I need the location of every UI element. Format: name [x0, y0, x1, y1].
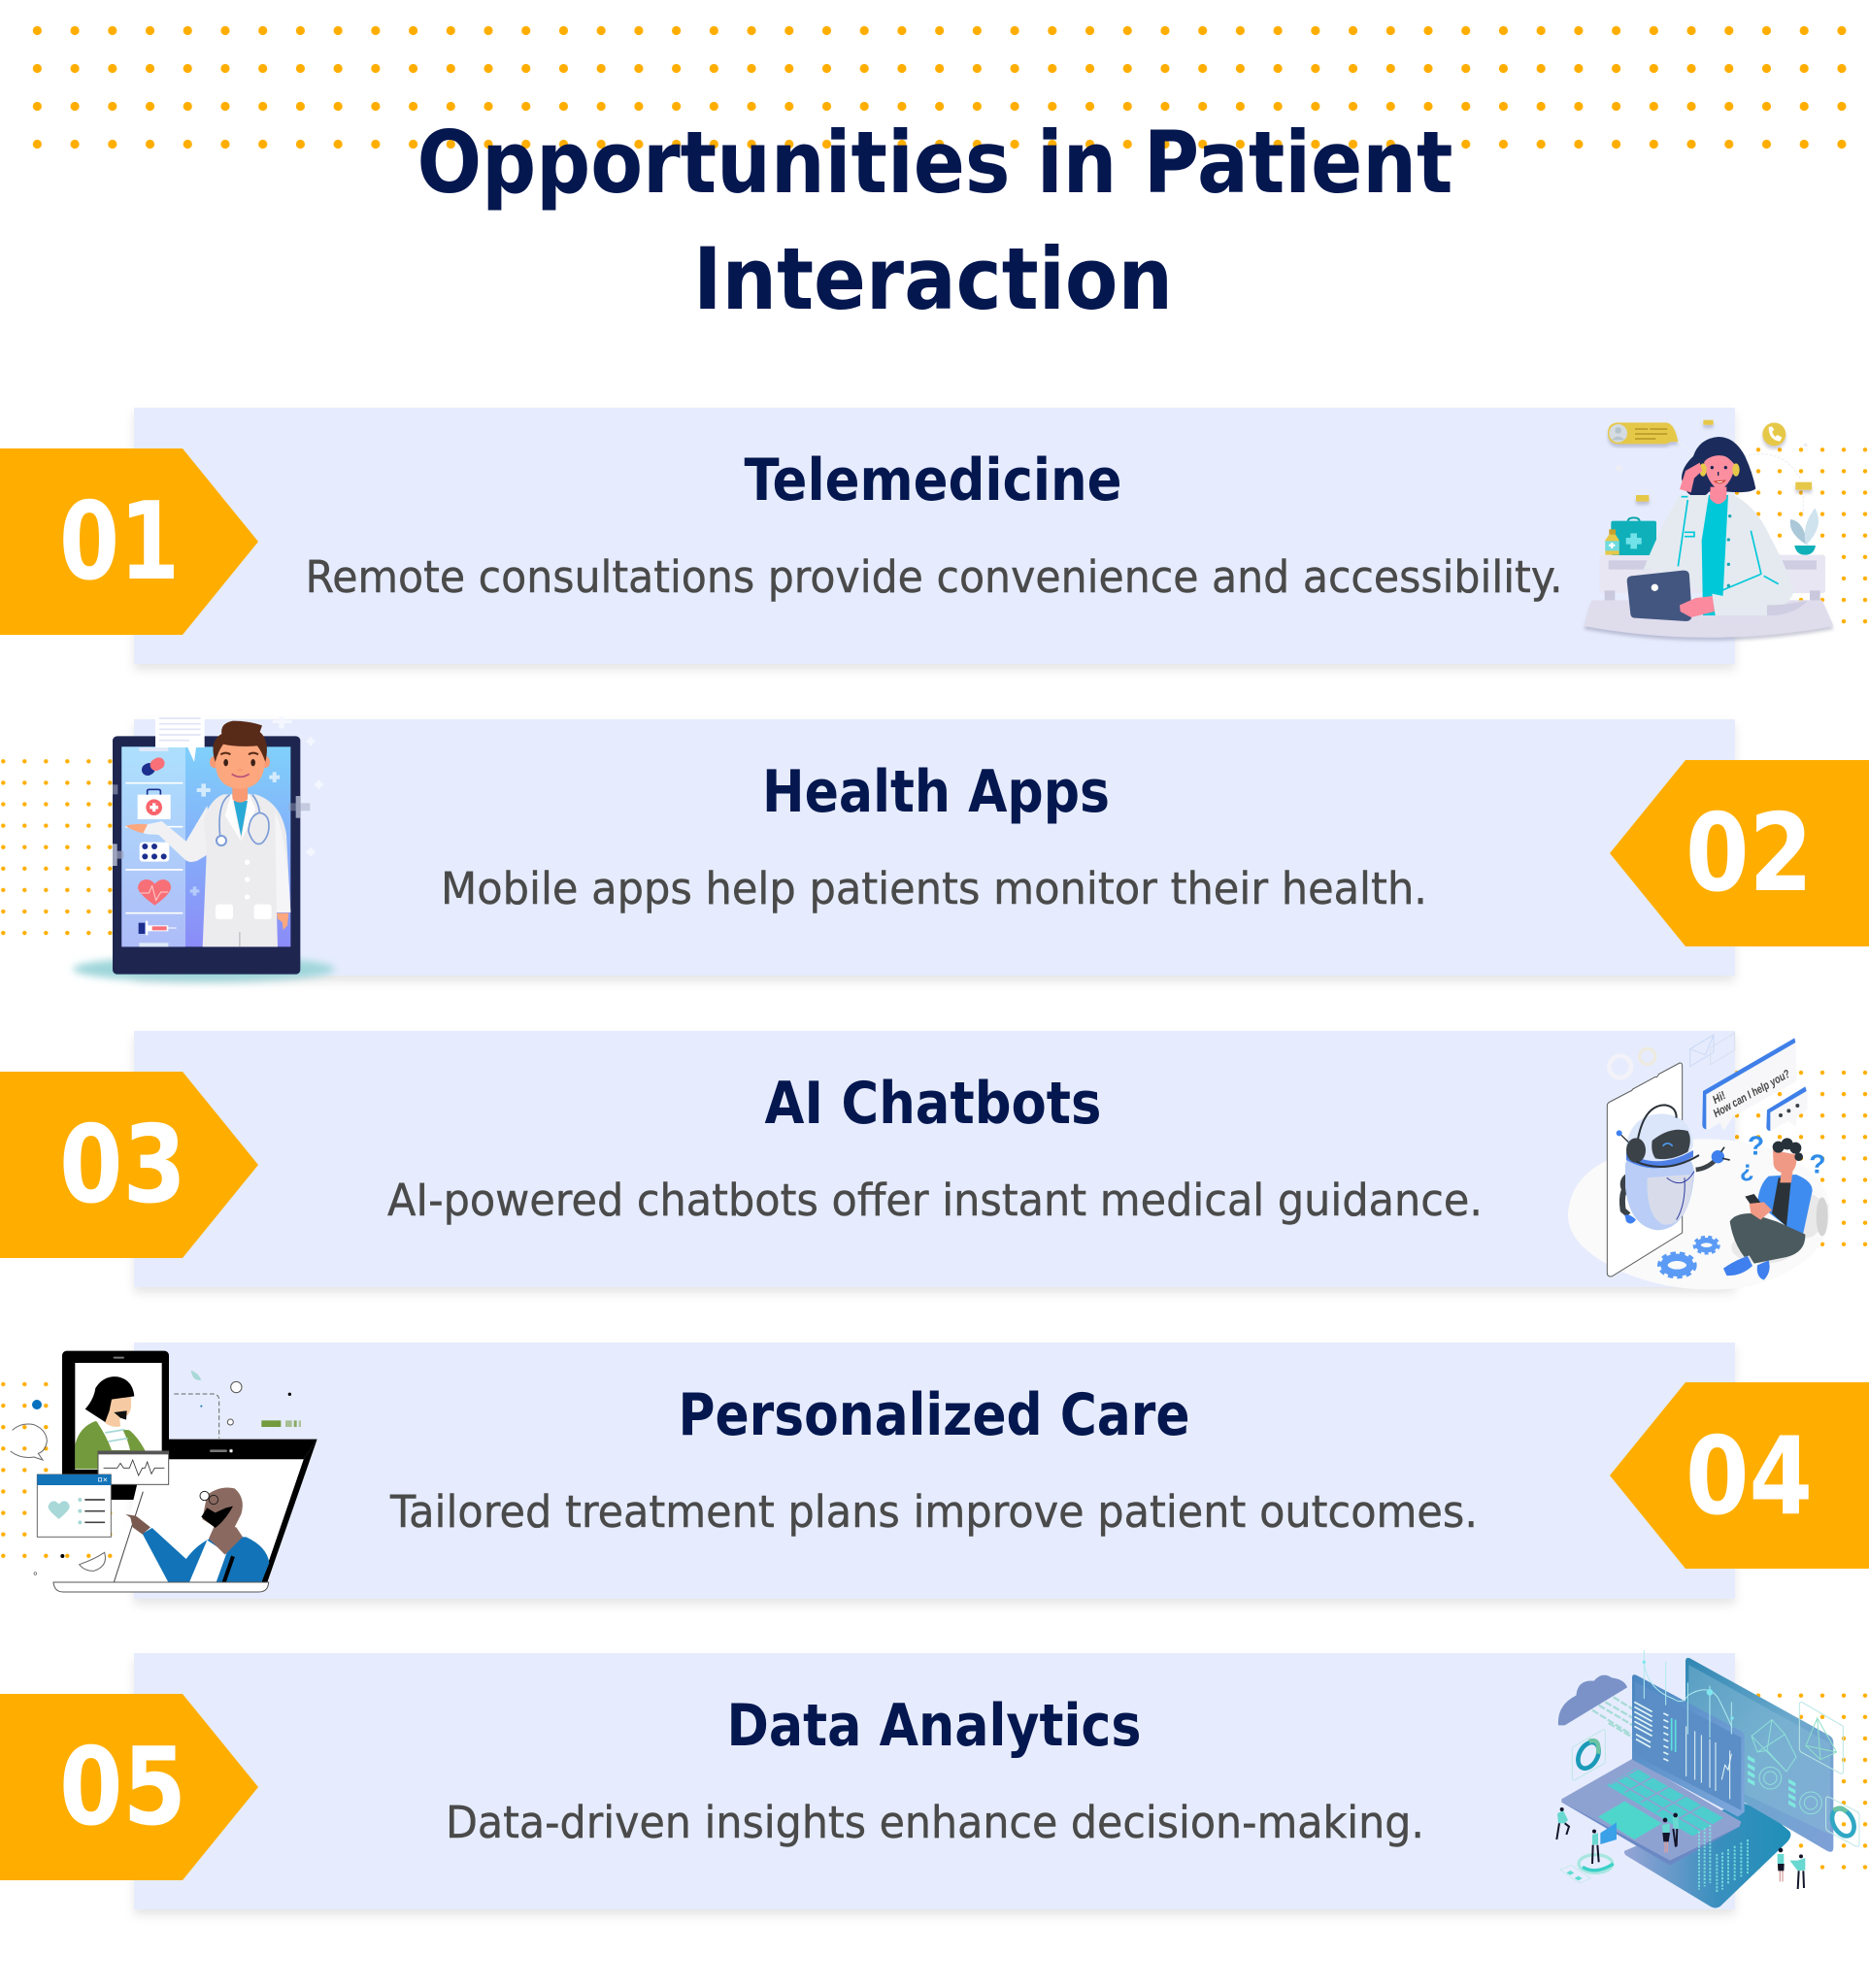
description: Tailored treatment plans improve patient outcomes.	[389, 1486, 1478, 1538]
number tag 02	[1610, 760, 1869, 946]
faint envelopes	[1690, 1033, 1735, 1067]
neck and face	[1710, 487, 1726, 504]
floating polyhedron card	[1799, 1703, 1843, 1773]
heading: Telemedicine	[744, 447, 1122, 514]
coat	[203, 794, 290, 946]
neck and face	[104, 1396, 131, 1427]
headset	[1638, 1105, 1677, 1141]
title: Opportunities in Patient	[417, 113, 1452, 213]
ground shadow	[73, 956, 335, 982]
laptop base	[1561, 1759, 1741, 1866]
extended arm	[125, 806, 214, 862]
heart window	[37, 1474, 111, 1537]
floating trend lines	[1644, 1650, 1732, 1738]
code lines on screen	[1634, 1702, 1668, 1761]
legs	[1730, 1213, 1805, 1264]
blue floating panel	[1600, 1822, 1617, 1844]
keyboard	[1607, 1769, 1723, 1837]
trend nodes	[1643, 1661, 1734, 1720]
shirt	[97, 1422, 130, 1450]
doctor	[125, 721, 290, 946]
question marks	[1740, 1130, 1825, 1183]
tablet with patient	[62, 1351, 169, 1500]
heading: Data Analytics	[726, 1692, 1142, 1760]
cloud	[1558, 1675, 1627, 1725]
description: Mobile apps help patients monitor their health.	[441, 863, 1427, 914]
fringe	[1702, 448, 1737, 468]
big monitor	[1685, 1658, 1833, 1852]
wireframe shapes	[1752, 1720, 1821, 1814]
side dots row 4	[0, 1374, 120, 1567]
left ring platform	[1560, 1855, 1614, 1883]
ECG window	[98, 1451, 169, 1484]
icon: pill	[140, 755, 167, 778]
question marks: ¿	[1740, 1157, 1754, 1183]
body	[1625, 1148, 1694, 1230]
laptop screen	[1632, 1674, 1745, 1817]
lower plate	[1624, 1803, 1790, 1908]
illustration: health app doctor on tablet	[73, 716, 335, 982]
hand on laptop	[1680, 596, 1715, 617]
buttons and pockets	[216, 860, 272, 919]
trackpad	[1598, 1802, 1662, 1839]
robot	[1617, 1105, 1730, 1230]
cabinet	[1599, 555, 1825, 601]
lapels	[225, 793, 255, 842]
desk shadow patch	[1767, 600, 1808, 615]
panel 5: data analytics	[134, 1653, 1735, 1909]
jacket	[75, 1421, 145, 1469]
stethoscope	[219, 795, 269, 844]
icon: blister pack	[140, 843, 169, 862]
face details	[1711, 466, 1727, 476]
small typing bubble	[1766, 1086, 1808, 1131]
number tag 04: 04	[1685, 1414, 1813, 1540]
base	[53, 1582, 269, 1592]
desk	[1585, 600, 1833, 638]
plant	[1790, 508, 1819, 555]
decorative small shapes	[34, 1371, 291, 1574]
illustration: data analytics laptop	[1556, 1650, 1859, 1908]
donut card right	[1826, 1797, 1859, 1846]
panel 3: AI chatbots	[134, 1031, 1735, 1287]
sleeve cuff	[1712, 594, 1767, 615]
chat bubble: Hi!	[1710, 1088, 1728, 1107]
panel background	[134, 719, 1735, 976]
faint gears	[1609, 1048, 1655, 1077]
question marks: ?	[1748, 1130, 1764, 1160]
laptop with doctor	[53, 1440, 317, 1592]
panel 4: personalized care	[134, 1342, 1735, 1599]
face details	[220, 753, 258, 777]
pointing hand	[125, 1514, 150, 1535]
number tag 02: 02	[1685, 791, 1813, 916]
background dot pattern	[18, 12, 1861, 163]
data lines	[1592, 1697, 1636, 1738]
antenna	[1619, 1133, 1628, 1143]
shirt	[189, 1541, 226, 1582]
shoes	[1723, 1256, 1752, 1276]
yellow tags	[1636, 420, 1812, 502]
number tag 03	[0, 1072, 258, 1258]
shirt and neck	[234, 801, 248, 837]
number tag 03: 03	[59, 1103, 186, 1228]
panel background	[134, 1031, 1735, 1287]
number tag 05	[0, 1694, 258, 1880]
coat	[1644, 493, 1793, 615]
icon: syringe	[139, 921, 177, 935]
curly hair	[1773, 1138, 1803, 1161]
icon: heart	[138, 879, 171, 906]
icon: first aid kit	[138, 789, 171, 819]
head	[210, 756, 218, 768]
code on lower plate	[1699, 1825, 1748, 1893]
coat accents	[1678, 497, 1779, 590]
speech bubble outline	[11, 1424, 47, 1460]
gears	[1659, 1237, 1719, 1276]
chat bubble: How can I help you?	[1711, 1067, 1792, 1120]
hand at side	[277, 913, 288, 930]
grey cross tabs	[113, 784, 310, 866]
heading: Health Apps	[762, 758, 1110, 826]
phone frame	[1607, 1063, 1683, 1276]
heading: Personalized Care	[678, 1381, 1190, 1449]
title: Interaction	[693, 229, 1173, 329]
number tag 04	[1610, 1382, 1869, 1569]
question marks: ?	[1809, 1148, 1825, 1178]
chat bubble	[1702, 1038, 1797, 1131]
sidebar	[121, 746, 185, 946]
green bars	[261, 1420, 301, 1427]
sparkles and connector	[1616, 442, 1808, 517]
number tag 01	[0, 448, 258, 635]
left arm	[1622, 1184, 1631, 1215]
side dots row 2	[0, 750, 120, 944]
outer sparkles	[273, 716, 323, 856]
monitor bars	[1748, 1755, 1795, 1808]
neck and head	[1780, 1170, 1793, 1182]
tablet body	[113, 736, 300, 975]
panel background	[134, 408, 1735, 664]
description: AI-powered chatbots offer instant medical guidance.	[387, 1175, 1483, 1226]
side dots row 1	[1726, 439, 1869, 632]
illustration: AI chatbot	[1568, 1033, 1830, 1290]
raised hand	[1680, 463, 1702, 492]
panel background	[134, 1653, 1735, 1909]
illustration: telemedicine doctor at desk	[1585, 420, 1833, 638]
description: Remote consultations provide convenience and accessibility.	[305, 551, 1563, 603]
person	[1723, 1138, 1828, 1280]
sidebar dividers	[125, 783, 183, 913]
sparkle crosses	[190, 772, 280, 896]
headset	[1699, 463, 1707, 477]
bottle	[1605, 529, 1619, 555]
torso jacket	[1757, 1175, 1813, 1236]
tablet screen	[121, 746, 290, 946]
hands with phone	[1745, 1194, 1764, 1216]
scrubs	[1702, 495, 1728, 615]
phone badge	[1762, 422, 1786, 446]
blue dot	[32, 1400, 42, 1409]
side dots row 5	[1748, 1685, 1869, 1878]
jacket	[143, 1528, 269, 1582]
hair	[85, 1376, 134, 1422]
neck and head	[209, 1524, 243, 1555]
speech bubble	[1608, 422, 1678, 444]
screen chart bars	[1672, 1718, 1731, 1799]
side dots row 3	[1726, 1062, 1869, 1255]
glasses	[200, 1491, 218, 1505]
people	[1556, 1807, 1805, 1889]
right arm	[1696, 1158, 1717, 1170]
illustration: video consultation	[11, 1351, 317, 1592]
panel 1: telemedicine	[134, 408, 1735, 664]
panel 2: health apps	[134, 719, 1735, 976]
note card	[139, 716, 205, 946]
title	[417, 113, 1452, 329]
background blob	[1568, 1139, 1830, 1290]
cushion	[1789, 1194, 1828, 1242]
heading: AI Chatbots	[765, 1070, 1101, 1138]
medical bag	[1611, 517, 1656, 555]
hair	[213, 721, 267, 762]
laptop	[1627, 571, 1692, 621]
number tag 01: 01	[59, 480, 180, 605]
description: Data-driven insights enhance decision-making.	[446, 1797, 1424, 1848]
doctor	[1644, 437, 1808, 615]
hair	[1682, 437, 1755, 496]
donut card left	[1572, 1730, 1605, 1780]
panel background	[134, 1342, 1735, 1599]
head	[1626, 1113, 1693, 1166]
number tag 05: 05	[59, 1725, 186, 1850]
stethoscope cord	[1667, 1172, 1694, 1220]
beard	[201, 1507, 233, 1528]
